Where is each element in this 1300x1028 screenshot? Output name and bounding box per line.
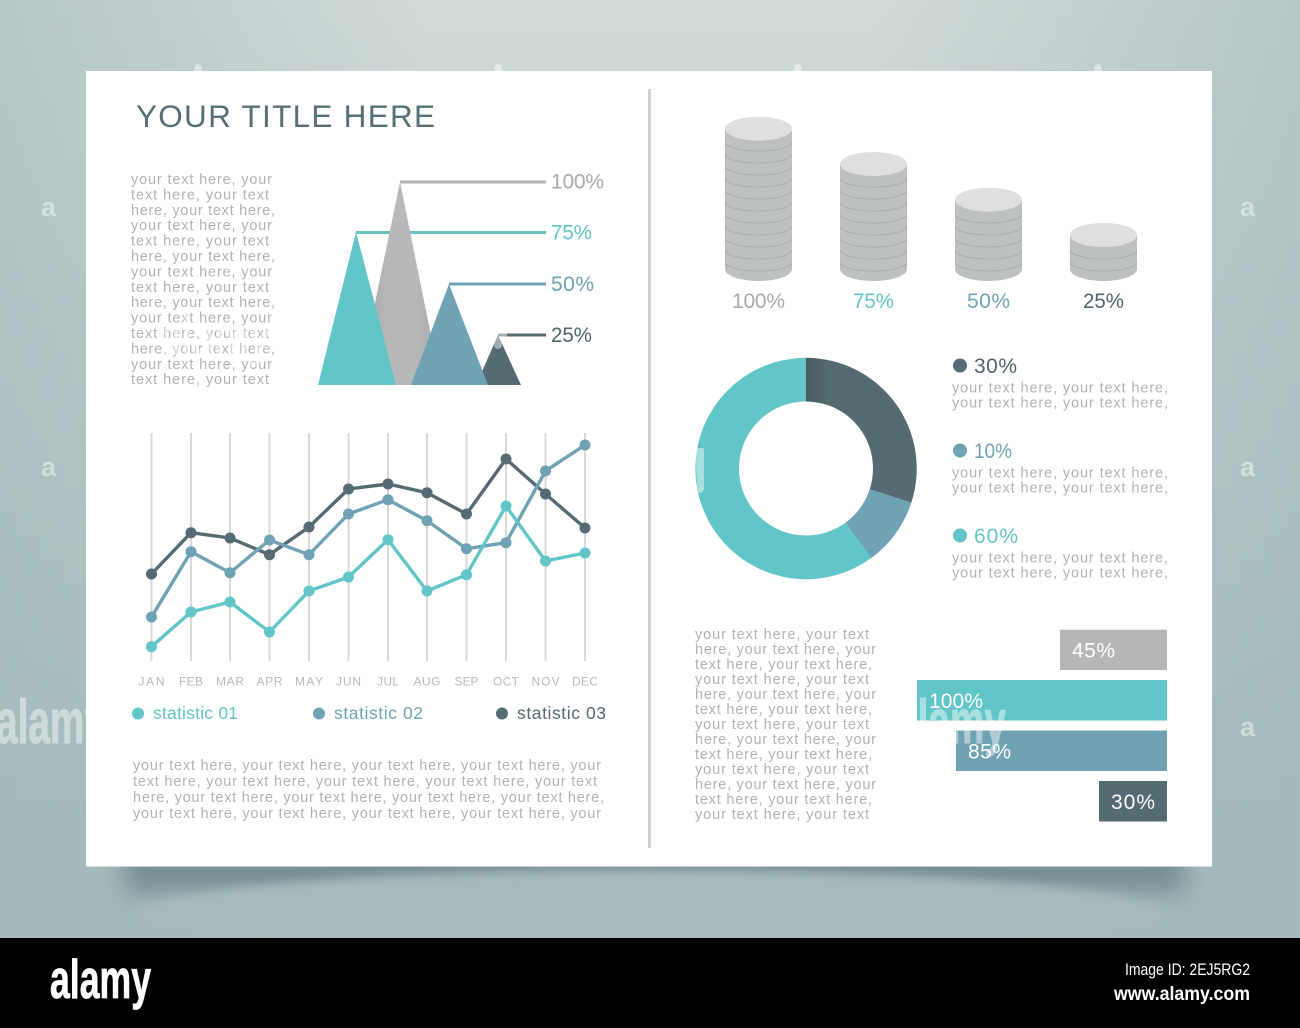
legend item: 10% — [952, 440, 1168, 496]
legend item: 60% — [952, 525, 1168, 582]
stack labels: 75% — [853, 290, 894, 313]
stack: 50% — [955, 188, 1022, 281]
triangle chart: 50% — [551, 273, 594, 296]
white card — [86, 71, 1212, 866]
text block: left column: your text here, your — [131, 357, 272, 373]
leader lines — [356, 182, 546, 335]
watermark outside card: alamy — [0, 688, 106, 757]
line chart — [138, 433, 598, 688]
legend item: 10%: your text here, your text here, — [952, 466, 1168, 482]
text block: left column: text here, your text — [131, 280, 269, 296]
image id: Image ID: 2EJ5RG2 — [1125, 960, 1250, 979]
line chart legend — [132, 703, 606, 723]
legend item: 60%: 60% — [974, 525, 1018, 548]
legend item: 60%: your text here, your text here, — [952, 550, 1168, 566]
text block: left column: your text here, your — [131, 172, 272, 188]
text block: left column: text here, your text — [131, 234, 269, 250]
series: statistic 01 — [146, 500, 590, 652]
donut legend — [952, 355, 1168, 582]
text block: left column: alamy — [160, 305, 270, 368]
month axis labels: MAR — [216, 674, 244, 688]
text block: bottom right: text here, your text here, — [695, 792, 872, 808]
text block: bottom right: your text here, your text — [695, 672, 869, 688]
triangle: 50% blue — [411, 284, 488, 385]
text block: bottom right: your text here, your text — [695, 807, 869, 823]
text block: bottom right: text here, your text here, — [695, 657, 872, 673]
grid lines — [152, 433, 585, 661]
horizontal bar chart — [896, 630, 1167, 822]
line chart legend: statistic 03 — [517, 703, 606, 723]
stack labels: 25% — [1083, 290, 1124, 313]
stack: 25% — [1070, 223, 1137, 281]
watermark outside card: a — [1240, 712, 1256, 742]
series: statistic 03 — [146, 454, 590, 580]
text block: bottom right: here, your text here, your — [695, 687, 876, 703]
line chart legend: statistic 02 — [334, 703, 423, 723]
footer url: www.alamy.com — [1113, 984, 1250, 1005]
triangle: 25% dark — [476, 335, 521, 385]
watermark outside card: a — [1240, 192, 1256, 222]
text block: bottom left: your text here, your text here, your text here, your text here, your — [133, 806, 601, 822]
watermark over bars: alamy — [896, 688, 1006, 757]
month axis labels: OCT — [493, 674, 520, 688]
watermark outside card: a — [41, 192, 57, 222]
text block: bottom right: your text here, your text — [695, 627, 869, 643]
segment: 30% dark — [806, 358, 917, 503]
month axis labels: AUG — [414, 674, 440, 688]
text block: bottom left: text here, your text here, your text here, your text here, your text — [133, 774, 597, 790]
text block: left column: here, your text here, — [131, 203, 275, 219]
labels: 100% — [551, 170, 604, 194]
watermark outside card — [0, 64, 1256, 757]
text block: bottom right: your text here, your text — [695, 762, 869, 778]
triangle: 100% grey — [358, 182, 441, 385]
legend item: 30%: your text here, your text here, — [952, 396, 1168, 412]
month axis labels — [138, 674, 598, 688]
month axis labels: SEP — [454, 674, 478, 688]
text block: left column: here, your text here, — [131, 295, 275, 311]
triangle chart: 25% — [551, 324, 592, 347]
triangle chart: 75% — [551, 222, 592, 244]
text block: left column — [131, 172, 275, 388]
stack labels: 100% — [732, 290, 785, 313]
month axis labels: JAN — [138, 674, 164, 688]
text block: bottom right: here, your text here, your — [695, 732, 876, 748]
text block: bottom left — [133, 758, 604, 822]
bar: 45% — [1060, 630, 1167, 670]
month axis labels: DEC — [572, 674, 598, 688]
text block: bottom right — [695, 627, 876, 823]
segment: 60% teal — [695, 358, 871, 579]
month axis labels: JUL — [377, 674, 399, 688]
text block: bottom right: text here, your text here, — [695, 702, 872, 718]
legend item: 10%: your text here, your text here, — [952, 480, 1168, 496]
month axis labels: JUN — [336, 674, 361, 688]
watermark outside card: a — [41, 452, 57, 482]
series: statistic 02 — [146, 440, 590, 622]
bar: 85%: 85% — [968, 740, 1011, 764]
stack: 100% — [725, 117, 792, 281]
text block: left column: here, your text here, — [131, 249, 275, 265]
coin stacks — [725, 117, 1137, 313]
footer logo: alamy — [50, 948, 151, 1010]
bar: 100% — [917, 680, 1167, 720]
watermark spot on donut — [696, 448, 704, 493]
bar: 45%: 45% — [1072, 640, 1115, 662]
text block: bottom right: here, your text here, your — [695, 777, 876, 793]
triangle: 75% teal — [318, 232, 396, 385]
watermark spot on small triangle — [494, 334, 507, 349]
legend item: 30% — [952, 355, 1168, 412]
text block: left column: your text here, your — [131, 264, 272, 280]
text block: left column: your text here, your — [131, 218, 272, 234]
text block: bottom right: here, your text here, your — [695, 642, 876, 658]
donut chart — [695, 358, 917, 579]
card shadow — [125, 850, 1185, 964]
month axis labels: APR — [256, 674, 283, 688]
month axis labels: MAY — [295, 674, 323, 688]
stack labels — [732, 290, 1124, 313]
legend item: 30%: 30% — [974, 355, 1017, 378]
title: YOUR TITLE HERE — [136, 98, 435, 134]
text block: left column: here, your text here, — [131, 341, 275, 357]
text block: bottom right: text here, your text here, — [695, 747, 872, 763]
text block: left column: text here, your text — [131, 187, 269, 203]
legend item: 60%: your text here, your text here, — [952, 566, 1168, 582]
text block: left column: text here, your text — [131, 372, 269, 388]
bar: 85% — [956, 730, 1167, 771]
stack labels: 50% — [967, 290, 1010, 313]
bar: 30% — [1099, 781, 1167, 822]
watermark outside card: a — [1240, 452, 1256, 482]
text block: left column: text here, your text — [131, 326, 269, 342]
bar: 100%: 100% — [929, 690, 983, 713]
text block: left column: your text here, your — [131, 311, 272, 327]
bar: 30%: 30% — [1111, 791, 1155, 814]
footer bar — [0, 938, 1300, 1028]
line chart legend: statistic 01 — [153, 703, 238, 723]
stack: 75% — [840, 152, 907, 281]
text block: bottom left: here, your text here, your text here, your text here, your text here, — [133, 790, 604, 806]
text block: bottom right: your text here, your text — [695, 717, 869, 733]
legend item: 10%: 10% — [974, 440, 1012, 463]
centre divider — [648, 89, 651, 848]
segment: 10% blue — [845, 489, 911, 558]
month axis labels: NOV — [532, 674, 560, 688]
month axis labels: FEB — [179, 674, 203, 688]
text block: bottom left: your text here, your text here, your text here, your text here, your — [133, 758, 601, 774]
triangle chart — [318, 170, 604, 385]
legend item: 30%: your text here, your text here, — [952, 380, 1168, 396]
